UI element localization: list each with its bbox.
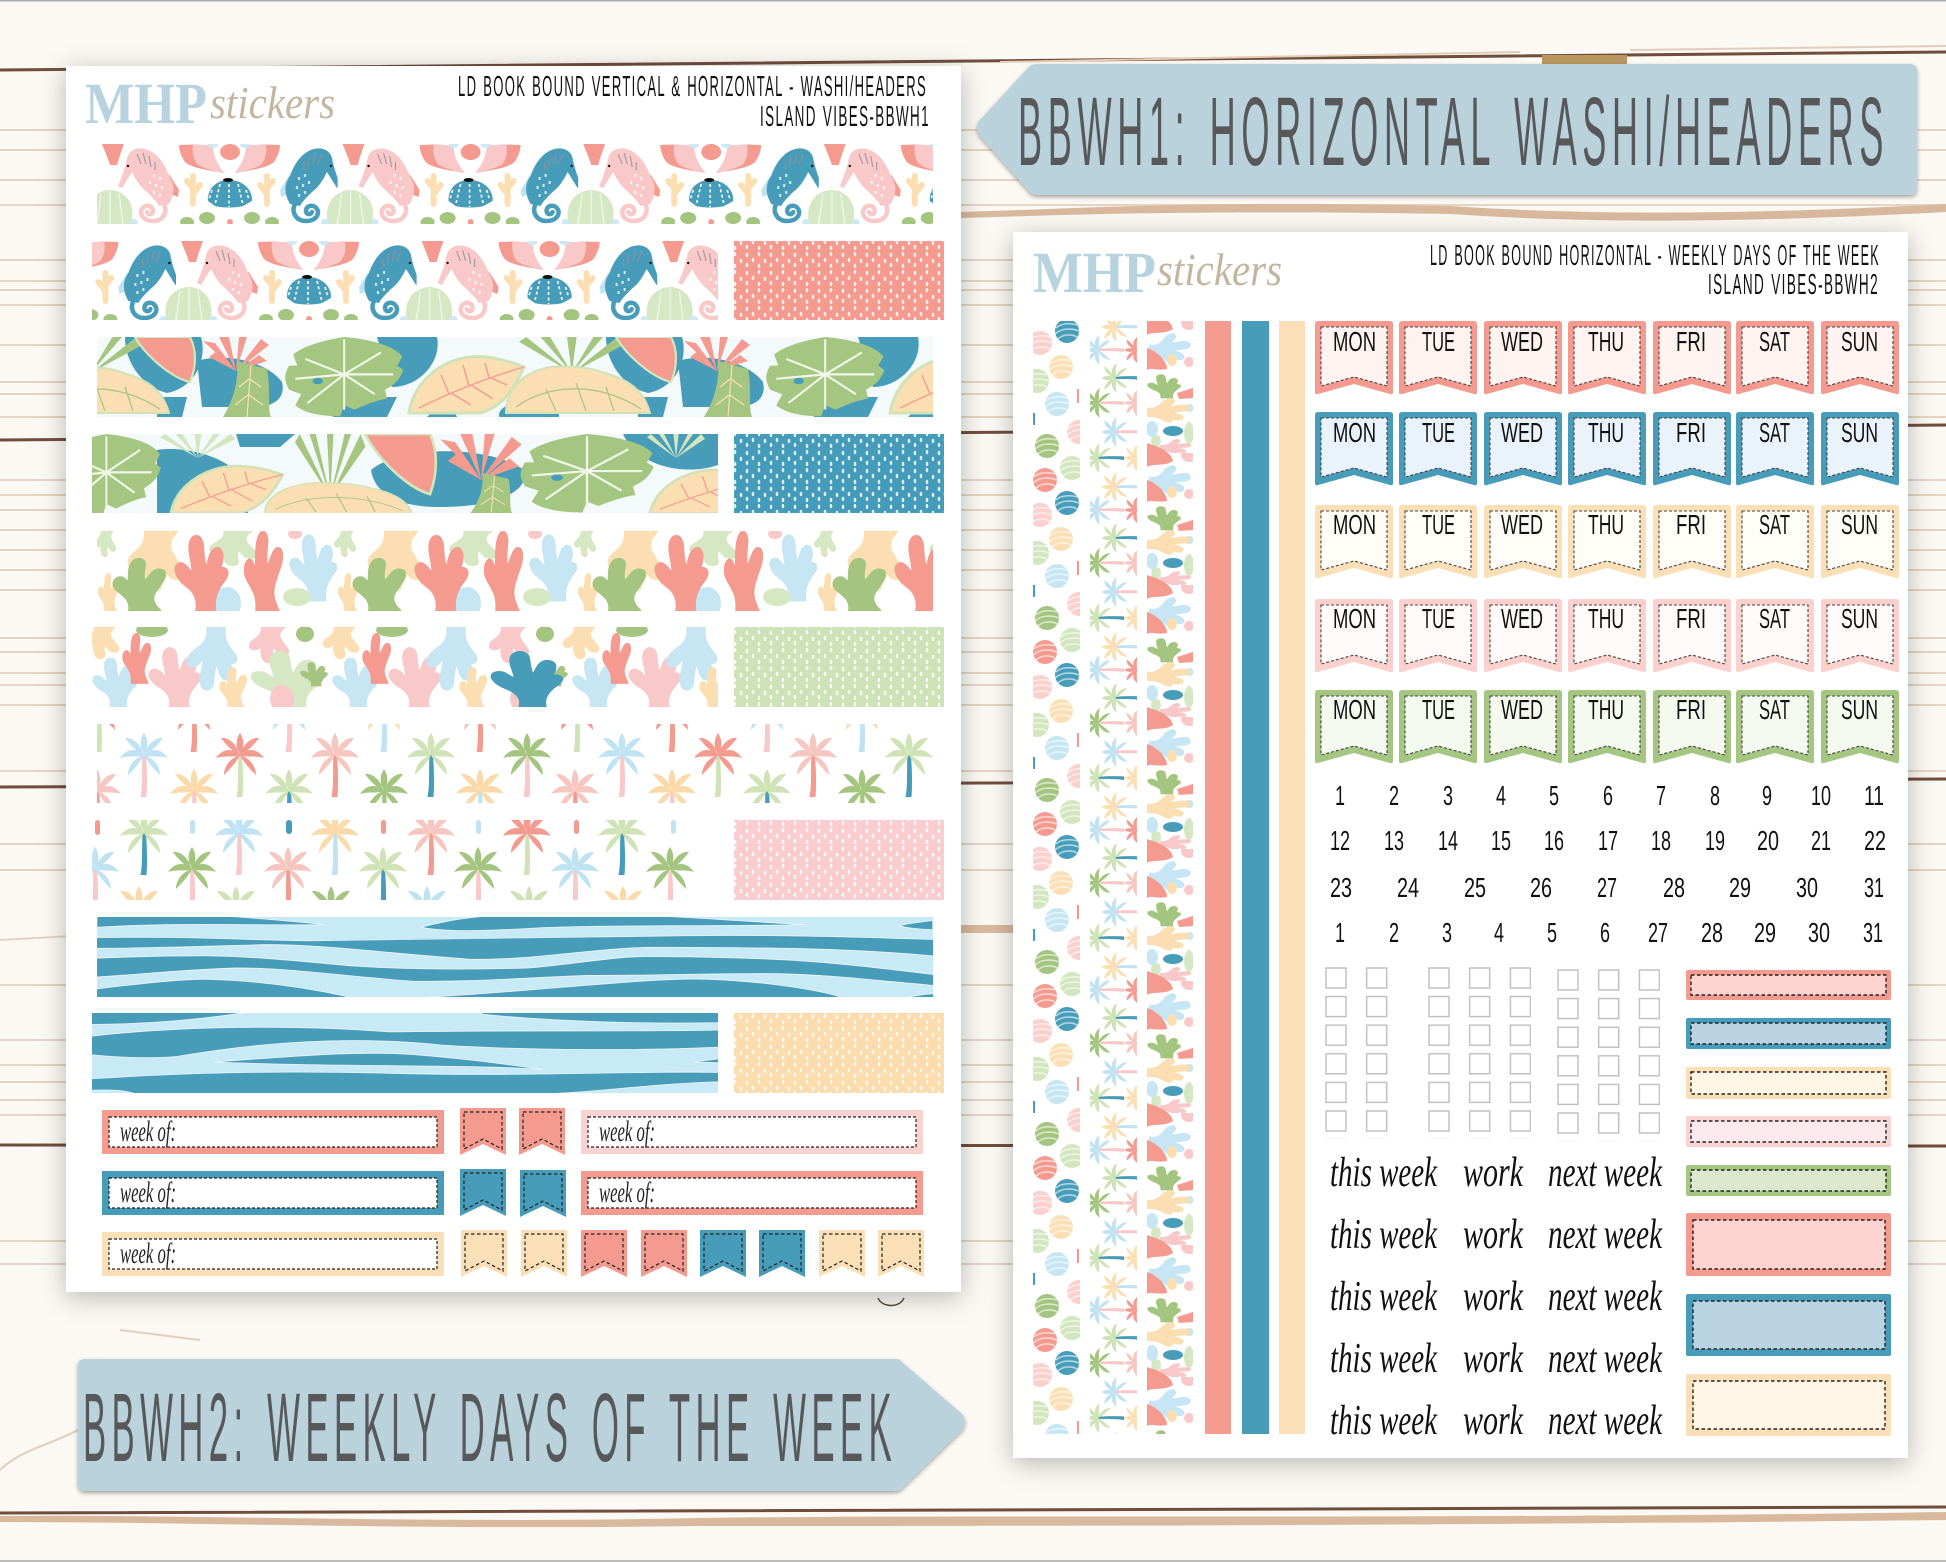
swatch: yellow dots — [734, 1013, 944, 1093]
washi strip: palm trees short — [92, 820, 694, 900]
vertical bar: salmon — [1205, 321, 1231, 1434]
date numbers: 20 — [1757, 825, 1779, 856]
day flags row: pink: SUN — [1841, 603, 1878, 634]
vertical washi: shells — [1033, 321, 1080, 1434]
day flags row: salmon: THU — [1588, 326, 1624, 357]
day flags row: pink: SAT — [1759, 603, 1790, 634]
day flags row: salmon: WED — [1501, 326, 1543, 357]
logo: MHP stickers — [85, 71, 335, 136]
week-of label: salmon — [102, 1110, 444, 1154]
panel: sheet BBWH1 washi and headers — [52, 66, 961, 1292]
date numbers: 23 — [1330, 872, 1352, 903]
script words: this week, work, next week: this week — [1330, 1336, 1438, 1382]
date numbers: 18 — [1651, 825, 1671, 856]
day flags row: salmon: SUN — [1841, 326, 1878, 357]
script words: this week, work, next week: next week — [1548, 1150, 1663, 1196]
script words: this week, work, next week: this week — [1330, 1212, 1438, 1258]
logo: MHP stickers: stickers — [210, 77, 335, 128]
date numbers: 22 — [1864, 825, 1886, 856]
script words: this week, work, next week: this week — [1330, 1150, 1438, 1196]
day flags row: teal: TUE — [1422, 417, 1455, 448]
day flags row: green: SAT — [1759, 694, 1790, 725]
washi strip: seahorses — [97, 144, 933, 224]
week-of label: pink: week of: — [599, 1115, 655, 1148]
script words: this week, work, next week: work — [1463, 1150, 1524, 1196]
date numbers: 21 — [1811, 825, 1831, 856]
washi strip: waves short — [89, 1011, 723, 1094]
washi strip: jungle leaves — [97, 337, 933, 417]
date numbers: 16 — [1544, 825, 1564, 856]
heading: sheet title — [1430, 240, 1880, 301]
date numbers: 5 — [1549, 780, 1559, 811]
day flags row: teal: SAT — [1759, 417, 1790, 448]
day flags row: pink: TUE — [1422, 603, 1455, 634]
date numbers: 17 — [1598, 825, 1618, 856]
day flags row: salmon: MON — [1333, 326, 1376, 357]
week-of label: salmon second — [581, 1171, 923, 1215]
day flags row: yellow — [1315, 505, 1899, 578]
date numbers: 30 — [1796, 872, 1818, 903]
washi strip: jungle leaves short — [92, 434, 718, 513]
day flags row: pink: FRI — [1676, 603, 1706, 634]
date numbers: 29 — [1729, 872, 1751, 903]
panel: sheet BBWH1 washi and headers: ISLAND VIBES-BBWH1 — [760, 101, 930, 133]
day flags row: teal: WED — [1501, 417, 1543, 448]
day flags row: yellow: MON — [1333, 509, 1376, 540]
date numbers: 3 — [1442, 917, 1452, 948]
day flags row: yellow: SUN — [1841, 509, 1878, 540]
heading: sheet title — [458, 71, 930, 133]
date numbers: 28 — [1663, 872, 1685, 903]
week-of label: salmon: week of: — [120, 1115, 176, 1148]
date numbers: 1 — [1335, 780, 1345, 811]
day flags row: yellow: THU — [1588, 509, 1624, 540]
date numbers: 4 — [1496, 780, 1506, 811]
date numbers: 12 — [1330, 825, 1350, 856]
day flags row: yellow: WED — [1501, 509, 1543, 540]
date numbers: 25 — [1464, 872, 1486, 903]
script words: this week, work, next week: work — [1463, 1336, 1524, 1382]
day flags row: green: WED — [1501, 694, 1543, 725]
swatch: teal dots — [734, 434, 944, 513]
day flags row: salmon: SAT — [1759, 326, 1790, 357]
day flags row: pink — [1315, 599, 1899, 672]
vertical bar: teal — [1242, 321, 1269, 1434]
day flags row: yellow: FRI — [1676, 509, 1706, 540]
week-of label: teal — [102, 1171, 444, 1215]
script words: this week, work, next week: next week — [1548, 1336, 1663, 1382]
day flags row: teal: SUN — [1841, 417, 1878, 448]
washi strip: waves — [89, 915, 940, 998]
date numbers: 4 — [1494, 917, 1504, 948]
date numbers: 10 — [1811, 780, 1831, 811]
logo: MHP stickers: stickers — [1157, 244, 1282, 295]
date numbers: 9 — [1762, 780, 1772, 811]
date numbers: 8 — [1710, 780, 1720, 811]
day flags row: teal — [1315, 412, 1899, 485]
script words: this week, work, next week — [1330, 1150, 1663, 1444]
week-of label: yellow: week of: — [120, 1237, 176, 1270]
day flags row: green: TUE — [1422, 694, 1455, 725]
washi strip: coral — [97, 531, 933, 611]
script words: this week, work, next week: next week — [1548, 1274, 1663, 1320]
week-of label: teal: week of: — [120, 1176, 176, 1209]
script words: this week, work, next week: next week — [1548, 1212, 1663, 1258]
date numbers: 19 — [1705, 825, 1725, 856]
day flags row: salmon — [1315, 321, 1899, 394]
vertical washi: coral — [1147, 321, 1193, 1434]
day flags row: yellow: TUE — [1422, 509, 1455, 540]
date numbers: 6 — [1603, 780, 1613, 811]
day flags row: pink: WED — [1501, 603, 1543, 634]
week-of label: yellow — [102, 1232, 444, 1276]
day flags row: green: SUN — [1841, 694, 1878, 725]
date numbers: 26 — [1530, 872, 1552, 903]
day flags row: yellow: SAT — [1759, 509, 1790, 540]
date numbers: 29 — [1754, 917, 1776, 948]
date numbers: 27 — [1597, 872, 1617, 903]
large header labels — [1686, 1213, 1891, 1436]
swatch: pink dots — [734, 820, 944, 900]
swatch: green dots — [734, 627, 944, 707]
date numbers: 2 — [1389, 780, 1399, 811]
day flags row: salmon: FRI — [1676, 326, 1706, 357]
date numbers: 31 — [1864, 872, 1884, 903]
date numbers: 27 — [1648, 917, 1668, 948]
date numbers: 1 — [1335, 917, 1345, 948]
day flags row: pink: MON — [1333, 603, 1376, 634]
logo: MHP stickers — [1033, 240, 1282, 305]
washi strip: coral short — [92, 627, 718, 707]
day flags row: pink: THU — [1588, 603, 1624, 634]
script words: this week, work, next week: work — [1463, 1274, 1524, 1320]
date numbers: 28 — [1701, 917, 1723, 948]
date numbers: 30 — [1808, 917, 1830, 948]
vertical washi: palms — [1090, 321, 1137, 1434]
panel: sheet BBWH2 weekly days of the week — [1013, 232, 1908, 1458]
week-of label: salmon second: week of: — [599, 1176, 655, 1209]
script words: this week, work, next week: this week — [1330, 1398, 1438, 1444]
washi strip: seahorses short — [92, 241, 718, 320]
day flags row: teal: THU — [1588, 417, 1624, 448]
date numbers: 6 — [1600, 917, 1610, 948]
date numbers: 15 — [1491, 825, 1511, 856]
script words: this week, work, next week: work — [1463, 1212, 1524, 1258]
day flags row: salmon: TUE — [1422, 326, 1455, 357]
small bookmark flags — [460, 1108, 924, 1277]
small header labels — [1686, 970, 1891, 1196]
day flags row: green — [1315, 690, 1899, 763]
vertical bar: yellow — [1279, 321, 1305, 1434]
script words: this week, work, next week: work — [1463, 1398, 1524, 1444]
date numbers: 13 — [1384, 825, 1404, 856]
day flags row: teal: MON — [1333, 417, 1376, 448]
checkboxes — [1325, 967, 1660, 1141]
week-of label: pink — [581, 1110, 923, 1154]
text: LD BOOK BOUND VERTICAL & HORIZONTAL - WASHI/HEADERS — [458, 71, 927, 103]
day flags row: teal: FRI — [1676, 417, 1706, 448]
logo: MHP stickers: MHP — [85, 71, 207, 136]
date numbers: 14 — [1438, 825, 1458, 856]
date numbers: 2 — [1389, 917, 1399, 948]
swatch: salmon dots — [734, 241, 944, 320]
date numbers — [1330, 780, 1886, 948]
date numbers: 11 — [1864, 780, 1884, 811]
script words: this week, work, next week: this week — [1330, 1274, 1438, 1320]
script words: this week, work, next week: next week — [1548, 1398, 1663, 1444]
day flags row: green: THU — [1588, 694, 1624, 725]
logo: MHP stickers: MHP — [1033, 240, 1156, 305]
day flags row: green: MON — [1333, 694, 1376, 725]
date numbers: 31 — [1863, 917, 1883, 948]
date numbers: 24 — [1397, 872, 1419, 903]
washi strip: palm trees — [97, 724, 933, 803]
date numbers: 5 — [1547, 917, 1557, 948]
banner: BBWH2 weekly days of the week — [78, 1359, 965, 1491]
date numbers: 3 — [1443, 780, 1453, 811]
day flags row: green: FRI — [1676, 694, 1706, 725]
date numbers: 7 — [1656, 780, 1666, 811]
